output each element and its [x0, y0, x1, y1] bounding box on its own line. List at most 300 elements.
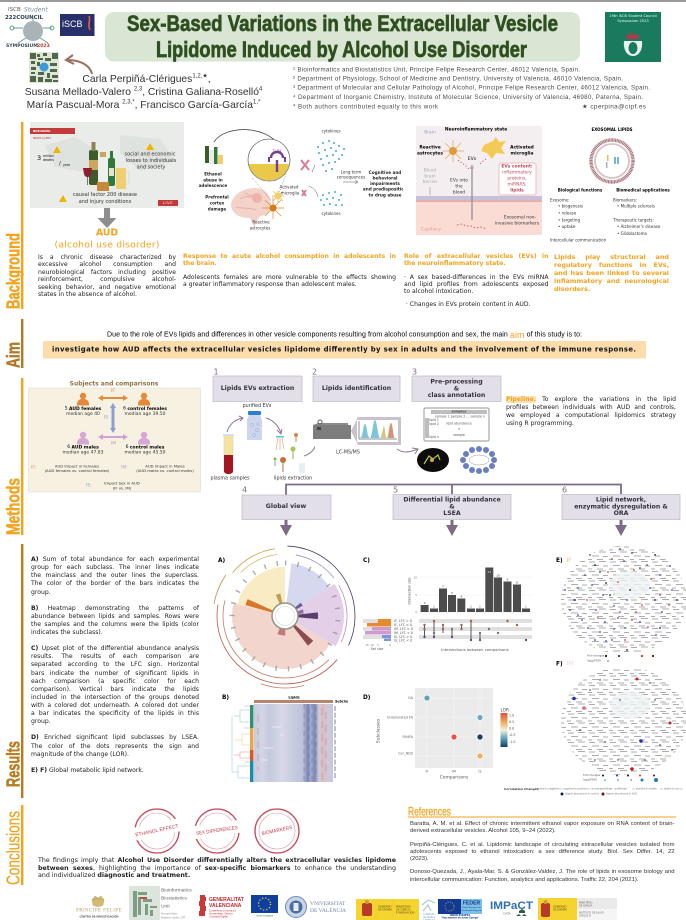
network correlation legend: Higher abundance in control	[565, 792, 599, 796]
pipeline step headers 1 to 3: Lipids identification	[322, 385, 391, 392]
chart C: upset plot: 8	[516, 580, 518, 584]
chart C: upset plot: 0	[389, 643, 391, 647]
logo: iSCB	[60, 14, 94, 36]
logo: Instituto de Salud Carlos III: de Salud	[423, 915, 435, 919]
logo: Instituto de Salud Carlos III	[420, 898, 437, 920]
logo: IMPaCT data: DATA	[503, 912, 511, 916]
chart C: upset plot: 13	[487, 570, 491, 574]
text: results legend: indicates the subclass).	[31, 629, 103, 636]
pipeline step headers 4 to 6 with connectors: Differential lipid abundance	[403, 496, 501, 504]
logo: European Union flag	[251, 895, 279, 919]
text: response to acute alcohol consumption: a greater inflammatory response than adolescent males.	[183, 281, 357, 288]
chart C: upset plot: C)	[363, 558, 370, 564]
logo: Gobierno de Espana 2: INSTITUTO DE SALUD	[579, 912, 604, 914]
logo: ISCB student council symposium: ISCB	[8, 7, 21, 13]
logo: Gobierno de Espana: MINISTERIO	[396, 904, 411, 908]
chart C: upset plot	[363, 558, 532, 652]
affiliations: * Both authors contributed equally to this work	[293, 104, 439, 110]
illustration: neuroinflammatory state: microglia	[511, 150, 534, 156]
chart C: upset plot: 2	[424, 601, 426, 605]
text: AUD definition: neurobiological factors including positive	[38, 269, 176, 276]
chart D: LSEA dot plot: 0.5	[509, 720, 514, 724]
text: results legend: C) Upset plot of the differential abundance analysis	[31, 645, 199, 652]
panel: subjects and comparisons: IF:	[31, 464, 36, 470]
text: AUD definition: seeking behavior, and negative emotional	[38, 284, 176, 291]
chart A: circular abundance plot: A)	[218, 558, 225, 564]
chart D: LSEA dot plot	[363, 688, 516, 780]
chart C: upset plot: 1	[470, 604, 472, 608]
panel: subjects and comparisons: (AUD females vs. control females)	[45, 468, 110, 473]
text: results legend: each comparison (a specific color for each	[31, 678, 199, 685]
logo: Universitat de Valencia: VNIVERSITAT	[310, 901, 346, 907]
stamp: sex differences	[193, 807, 241, 855]
illustration: neuroinflammatory state: brain	[424, 174, 436, 180]
chart C: upset plot: IS, LFC < 0	[394, 638, 412, 642]
logo: Gobierno de Espana 2: GOBIERNO	[553, 904, 567, 908]
chart B: heatmap of lipids and samples: Lipids	[288, 696, 300, 700]
text: AUD definition: reinforcement, compulsive alcohol-	[38, 276, 176, 283]
network correlation legend	[504, 787, 683, 796]
text: AUD definition: excessive alcohol consumption and	[38, 261, 176, 268]
chart C: upset plot: 10	[370, 643, 374, 647]
illustration: exosomal lipids: • uptake	[558, 224, 576, 229]
chart D: LSEA dot plot: IM	[452, 770, 456, 774]
stamp: biomarkers: BIOMARKERS	[261, 825, 293, 837]
panel: subjects and comparisons: median age 39.50	[124, 411, 166, 417]
illustration: neuroinflammatory state: proteins,	[507, 176, 527, 182]
chart C: upset plot: 4	[460, 594, 462, 598]
illustration: neuroinflammatory state: Brain	[424, 130, 436, 136]
logo: Bioinformatics and Biostatistics Unit: Principe Felipe	[161, 912, 178, 916]
illustration: exosomal lipids: • targeting	[558, 218, 580, 222]
affiliations: ★ cperpina@cipf.es	[582, 104, 646, 110]
illustration: ethanol abuse in adolescence: Prefrontal	[205, 194, 229, 200]
logo: ISCB student council symposium: Student	[24, 6, 48, 14]
affiliations	[293, 66, 650, 110]
illustration: neuroinflammatory state: Blood	[424, 168, 436, 174]
chart D: LSEA dot plot: 0.0	[509, 726, 514, 730]
text: role of extracellular vesicles: · A sex based-differences in the EVs miRNA	[404, 274, 548, 281]
text: pipeline description: Pipeline. To explore the variations in the lipid	[506, 396, 676, 403]
panel: subjects and comparisons: IF	[111, 388, 115, 394]
text: role of extracellular vesicles: and lipid profiles from adolescents exposed	[404, 281, 548, 288]
chart C: upset plot: IM, LFC > 0	[394, 627, 413, 631]
logo: iSCB: iSCB	[62, 19, 83, 29]
logo: Bioinformatics and Biostatistics Unit: Bioinformatics	[161, 888, 192, 894]
illustration: exosomal lipids	[550, 127, 670, 242]
logo: ISCB student council symposium: SYMPOSIUM	[6, 43, 38, 49]
logo: ISCB student council symposium: 222COUNCIL	[5, 15, 44, 21]
pipeline step headers 4 to 6 with connectors: Lipid network,	[596, 496, 646, 504]
illustration: exosomal lipids: • Multiple sclerosis	[617, 204, 655, 208]
chart C: upset plot: 1	[525, 604, 527, 608]
illustration: exosomal lipids: Exosome:	[550, 198, 569, 202]
panel: global alcohol statistics illustration: year	[63, 163, 71, 167]
pipeline step headers 4 to 6 with connectors: 5	[393, 486, 398, 494]
text: response to acute alcohol consumption: Response to acute alcohol consumption in adolescents in	[183, 253, 396, 260]
logo: 19th ISCB student council symposium: Symposium 2023	[617, 19, 649, 23]
aim statement box: investigate how AUD affects the extracellular vesicles lipidome differently by sex in adults and the involvement of the immune response.	[52, 346, 636, 354]
chart C: upset plot: IF, LFC < 0	[394, 623, 412, 627]
logo: Generalitat Valenciana: Universitats, Ciència	[209, 912, 233, 916]
text: results legend: group for each subclass. The inner lines indicate	[31, 564, 199, 571]
text: results legend: D) Enriched significant lipid subclasses by LSEA.	[31, 734, 199, 741]
logo: Gobierno de Espana 2: DE CIENCIA	[579, 904, 593, 908]
illustration: neuroinflammatory state: miRNAS,	[507, 182, 527, 188]
chart C: upset plot: 1	[479, 604, 481, 608]
network correlation legend: unaffected	[614, 788, 627, 790]
logo: Bioinformatics and Biostatistics Unit: Unit	[161, 904, 170, 910]
reference list: Donoso-Quezada, J., Ayala-Mar, S. & González-Valdez, J. The role of lipids in exosome biology and	[410, 869, 674, 875]
arrow to QR code	[64, 54, 93, 74]
pipeline illustration: data table and databases: sample 1 sample 2 ... sample n	[435, 414, 485, 418]
stamp: ethanol effect	[133, 807, 181, 855]
chart D: LSEA dot plot: Comparisons	[440, 774, 469, 780]
chart D: LSEA dot plot: Cer_NDS	[398, 752, 413, 756]
logo: Gobierno de Espana	[356, 898, 420, 920]
logo: Principe Felipe: CENTRO DE INVESTIGACIÓN	[80, 914, 118, 918]
text: results legend: group.	[31, 588, 51, 596]
reference list: derived extracellular vesicles. Alcohol 105, 9–24 (2022).	[410, 828, 556, 834]
pipeline step headers 1 to 3: class annotation	[428, 392, 485, 399]
pipeline step headers 1 to 3: &	[454, 386, 460, 392]
pipeline illustration: data table and databases: ×	[458, 427, 461, 431]
illustration: ethanol abuse in adolescence: adolescence	[199, 183, 227, 188]
text: results legend: separated according to the LFC sign. Horizontal	[31, 661, 199, 668]
panel: subjects and comparisons: (AUD males vs. control males)	[136, 468, 194, 473]
text: conclusions: between sexes, highlighting the importance of sex-specific biomarkers to enhance the understanding	[38, 865, 396, 872]
illustration: ethanol abuse in adolescence: Cognitive and	[369, 170, 401, 175]
pipeline illustration: data table and databases: lipid 1	[429, 418, 439, 422]
section label: Results: Results	[4, 741, 24, 787]
network correlation legend: Higher abundance in AUD	[606, 792, 637, 796]
text: lipids structural and regulatory functions: inflammatory and neurological	[554, 277, 669, 285]
logo: Universitat de Valencia	[285, 893, 355, 920]
logo: ISCB student council symposium: 2023	[37, 43, 50, 49]
text: results legend: abundance between lipids and samples. Rows were	[31, 613, 199, 620]
section label: Aim	[4, 319, 24, 368]
illustration: ethanol abuse in adolescence: abuse in	[203, 178, 223, 182]
chart D: LSEA dot plot: IF	[426, 770, 429, 774]
illustration: exosomal lipids: • Glioblastoma	[617, 231, 647, 236]
illustration: exosomal lipids: Intercellular communication	[550, 238, 607, 242]
illustration: ethanol abuse in adolescence: cortex	[210, 200, 225, 206]
illustration: ethanol abuse in adolescence: behavioral	[372, 176, 398, 180]
text: role of extracellular vesicles	[404, 253, 548, 308]
pipeline illustration: lipid extraction	[210, 403, 315, 482]
logo: ISCB student council symposium	[5, 6, 54, 49]
affiliations: ² Department of Physiology, School of Medicine and Dentistry, University of Valencia, 46010 Valencia, Spain.	[293, 76, 623, 82]
illustration: neuroinflammatory state: astrocytes	[417, 150, 443, 156]
logo: European Union flag: Unión Europea	[256, 914, 274, 918]
logo: FEDER: FEDER	[463, 900, 481, 906]
text: role of extracellular vesicles: · Changes in EVs protein content in AUD.	[406, 301, 530, 308]
chart F: lipid network IM: log(p/FDR)	[583, 778, 597, 782]
illustration: neuroinflammatory state: EVs content:	[501, 164, 533, 170]
logo: Bioinformatics and Biostatistics Unit	[129, 886, 197, 920]
affiliations: ¹ Bioinformatics and Biostatistics Unit, Principe Felipe Research Center, 46012 Valencia, Spain.	[293, 66, 580, 74]
pipeline step headers 4 to 6 with connectors: Global view	[266, 503, 306, 510]
chart D: LSEA dot plot: GA	[408, 696, 414, 700]
panel: subjects and comparisons	[28, 380, 201, 492]
chart C: upset plot: Set size	[371, 647, 383, 651]
pipeline illustration: data table and databases: lipid abundance	[446, 422, 472, 426]
chart F: lipid network IM: IM	[566, 662, 573, 668]
chart E: lipid network IF: IF	[566, 558, 572, 564]
text: lipids structural and regulatory functions: Lipids play structural and	[554, 253, 669, 261]
reference list: intercellular communication: Function, analytics and applications. Traffic 22, 204 (2021).	[410, 877, 638, 883]
illustration: neuroinflammatory state: the	[455, 184, 463, 190]
pipeline step headers 4 to 6 with connectors: 4	[242, 486, 247, 494]
logo: FEDER: UNIÓN EUROPEA	[450, 914, 471, 917]
text: conclusions: The findings imply that Alcohol Use Disorder differentially alters the extracellular vesicles lipidome	[38, 857, 396, 864]
illustration: ethanol abuse in adolescence: consequences	[337, 174, 365, 180]
pipeline illustration: lipid extraction: plasma samples	[211, 476, 250, 482]
logo: Gobierno de Espana: DE ESPAÑA	[378, 906, 392, 912]
panel: global alcohol statistics illustration: LIVE	[163, 201, 173, 205]
illustration: ethanol abuse in adolescence: impairments	[370, 181, 400, 186]
pipeline step headers 1 to 3	[212, 368, 502, 402]
top rule	[0, 0, 686, 2]
logo: Gobierno de Espana: DE CIENCIA	[396, 908, 411, 912]
chart A: circular abundance plot	[214, 546, 356, 688]
pipeline illustration: data table and databases: lipid n	[429, 435, 439, 439]
pipeline step headers 4 to 6 with connectors: ORA	[614, 510, 629, 517]
illustration: exosomal lipids: • Alzheimer's disease	[617, 224, 661, 229]
logo: 19th ISCB student council symposium: 19th ISCB Student Council	[609, 14, 657, 18]
text: AUD definition	[38, 254, 176, 298]
text: results legend: A) Sum of total abundance for each experimental	[31, 556, 199, 563]
text: role of extracellular vesicles: Role of extracellular vesicles (EVs) in	[404, 253, 548, 260]
illustration: neuroinflammatory state: Neuroinflammatory state	[445, 126, 507, 132]
chart D: LSEA dot plot: D)	[363, 695, 371, 701]
chart C: upset plot: Intersections between comparisons	[441, 647, 509, 652]
chart D: LSEA dot plot: Subclasses	[376, 718, 382, 743]
pipeline step headers 1 to 3: Lipids EVs extraction	[221, 385, 294, 392]
QR code with twitter mark	[29, 52, 59, 83]
illustration: ethanol abuse in adolescence: Activated	[280, 184, 299, 190]
reference list: (2023).	[410, 856, 429, 862]
illustration: ethanol abuse in adolescence	[198, 128, 403, 230]
chart E: lipid network IF	[556, 546, 686, 662]
chart F: lipid network IM	[556, 661, 686, 782]
text: response to acute alcohol consumption: the brain.	[183, 260, 217, 267]
illustration: ethanol abuse in adolescence: cytokines	[321, 211, 341, 216]
logo: Universitat de Valencia: DE VALÈNCIA	[310, 906, 346, 914]
chart C: upset plot: IM, LFC < 0	[394, 631, 413, 635]
text: results legend: results. The results of each comparison are	[31, 653, 199, 660]
logo: Principe Felipe: PRINCIPE FELIPE	[76, 908, 122, 914]
text: pipeline description: profiles between individuals with AUD and controls,	[506, 404, 676, 411]
illustration: exosomal lipids: • biogenesis	[558, 204, 583, 208]
text: response to acute alcohol consumption	[183, 253, 396, 288]
illustration: exosomal lipids: Biomarkers:	[613, 198, 637, 202]
logo: FEDER: Desarrollo Regional	[461, 909, 482, 912]
text: results legend: bars indicate the number of significant lipids in	[31, 670, 199, 676]
text: results legend: group.	[31, 718, 51, 725]
text: lipids structural and regulatory functions	[554, 253, 669, 293]
pipeline step headers 4 to 6 with connectors: LSEA	[443, 510, 461, 517]
pipeline illustration: data table and databases	[396, 407, 497, 474]
illustration: ethanol abuse in adolescence: cytokines	[321, 128, 341, 134]
text: lipids structural and regulatory functions: disorders.	[554, 285, 590, 293]
chart C: upset plot: 15	[365, 643, 369, 647]
chart C: upset plot: 9	[507, 578, 509, 582]
reference list: adolescents exposed to ethanol intoxication: a sex difference study. Biol. Sex Differ. 14, 22	[410, 849, 674, 855]
title banner	[105, 12, 580, 62]
logo: Gobierno de Espana 2	[538, 897, 618, 920]
illustration: ethanol abuse in adolescence: Reactive	[252, 220, 270, 224]
text: results legend: included in the intersection of the groups denoted	[31, 694, 199, 701]
panel: subjects and comparisons: 6 control males	[126, 444, 165, 450]
authors: Carla Perpiñá-Clérigues1,2,★,	[82, 73, 211, 84]
logo: Gobierno de Espana 2: CARLOS III	[579, 914, 591, 918]
logo: Generalitat Valenciana: VALENCIANA	[209, 903, 242, 909]
chart C: upset plot: 5	[377, 643, 379, 647]
stamp: biomarkers	[253, 807, 301, 855]
illustration: neuroinflammatory state: blood	[453, 190, 465, 196]
logo: FEDER: Fondo Europeo de	[462, 906, 482, 909]
text: role of extracellular vesicles: to alcohol intoxication.	[404, 288, 473, 295]
logo: IMPaCT data	[488, 896, 535, 920]
pipeline illustration: lipid extraction: purified EVs	[243, 403, 272, 409]
authors: María Pascual-Mora 2,3,*, Francisco García-García1,*	[27, 100, 260, 111]
illustration: neuroinflammatory state	[416, 126, 542, 235]
panel: global alcohol statistics illustration: deaths	[43, 158, 54, 162]
chart D: LSEA dot plot: IS	[478, 770, 482, 774]
logo: FEDER: "Una manera de hacer Europa"	[441, 916, 479, 920]
logo: Generalitat Valenciana: GENERALITAT	[209, 897, 244, 903]
chart C: upset plot: 1	[433, 604, 435, 608]
chart C: upset plot: 10	[413, 576, 417, 580]
illustration: ethanol abuse in adolescence: astrocytes	[250, 226, 270, 230]
chart F: lipid network IM: F)	[556, 662, 563, 668]
illustration: ethanol abuse in adolescence: Long term	[341, 170, 361, 174]
network correlation legend: positive to stable	[636, 788, 657, 790]
text: results legend: magnitude of the change (LOR).	[31, 751, 129, 758]
pipeline illustration: LC-MS/MS and chromatogram	[313, 417, 401, 456]
AUD heading	[54, 228, 160, 250]
chart E: lipid network IF: log(p/FDR)	[587, 658, 601, 662]
pipeline step headers 4 to 6 with connectors: &	[449, 504, 455, 510]
text: conclusions	[38, 857, 396, 880]
panel: global alcohol statistics illustration: million	[43, 154, 54, 158]
chart E: lipid network IF: E)	[556, 558, 563, 564]
logo: Principe Felipe	[70, 893, 128, 920]
pipeline illustration: data table and databases: lipid 2	[429, 422, 439, 426]
text: pipeline description: we employed a computational lipidomics strategy	[506, 412, 676, 419]
chart C: upset plot: 10	[496, 574, 500, 578]
illustration: neuroinflammatory state: Activated	[510, 144, 534, 150]
text: results legend: The color of the dots represents the sign and	[31, 742, 199, 750]
panel: subjects and comparisons: IM:	[121, 464, 128, 470]
pipeline illustration: LC-MS/MS and chromatogram: LC-MS/MS	[336, 450, 360, 456]
panel: subjects and comparisons: median age 47.83	[62, 450, 104, 456]
logo: Gobierno de Espana: E INNOVACIÓN	[396, 910, 414, 914]
reference list: Baratta, A. M. et al. Effect of chronic intermittent ethanol vapor exposure on RNA content of brain-	[410, 821, 674, 827]
chart D: LSEA dot plot: -1.0	[509, 740, 515, 744]
chart B: heatmap of lipids and samples	[232, 696, 348, 782]
logo: Gobierno de Espana 2: DE ESPAÑA	[553, 906, 567, 912]
illustration: neuroinflammatory state: EVs	[468, 156, 477, 162]
logo: IMPaCT data: IMPaCT	[490, 900, 533, 912]
panel: subjects and comparisons: (IF vs. IM)	[113, 486, 132, 490]
illustration: exosomal lipids: Biological functions	[558, 188, 603, 192]
illustration: ethanol abuse in adolescence: damage	[208, 206, 226, 212]
pipeline step headers 4 to 6 with connectors	[242, 484, 680, 536]
panel: subjects and comparisons: Subjects and comparisons	[70, 380, 159, 388]
pipeline step headers 1 to 3: 3	[412, 368, 417, 376]
chart B label: B)	[222, 695, 229, 701]
illustration: ethanol abuse in adolescence: to drug abuse	[369, 192, 402, 198]
logo: Gobierno de Espana 2: MINISTERIO	[579, 902, 593, 904]
references	[408, 803, 676, 888]
text: role of extracellular vesicles: the neuroinflammatory state.	[404, 260, 506, 267]
illustration: neuroinflammatory state: lipids	[510, 188, 524, 194]
text: conclusions: and individualized diagnostic and treatment.	[38, 872, 190, 879]
panel: subjects and comparisons: IM	[111, 440, 116, 446]
panel: subjects and comparisons: 5 AUD females	[65, 406, 102, 412]
panel: subjects and comparisons: Impact Sex in AUD	[104, 480, 140, 486]
chart C: upset plot: Intersection size	[408, 577, 412, 605]
pipeline step headers 4 to 6 with connectors: enzymatic dysregulation &	[574, 504, 668, 510]
panel: global alcohol statistics illustration: and injury conditions	[79, 199, 132, 205]
logo: FEDER	[437, 898, 483, 920]
illustration: neuroinflammatory state: inflammatory	[502, 170, 532, 176]
panel: subjects and comparisons: 6 control females	[123, 406, 167, 412]
illustration: neuroinflammatory state: invasive biomarkers	[495, 220, 540, 226]
chart E: lipid network IF: Fold changes	[587, 654, 605, 658]
chart C: upset plot: 5	[415, 593, 417, 597]
logo: Bioinformatics and Biostatistics Unit: Biostatistics	[161, 896, 187, 902]
illustration: neuroinflammatory state: Capillary	[421, 226, 441, 232]
text: pipeline description: using R programming.	[506, 420, 574, 427]
aim statement box	[43, 341, 646, 358]
AUD heading: (alcohol use disorder)	[54, 240, 160, 250]
logo: Instituto de Salud Carlos III: Instituto	[423, 912, 435, 916]
panel: global alcohol statistics illustration: and society	[137, 164, 165, 170]
text: results legend: E) F) Global metabolic lipid network.	[31, 767, 144, 774]
illustration: ethanol abuse in adolescence: TLR4	[272, 149, 281, 153]
illustration: ethanol abuse in adolescence: microglia	[281, 190, 300, 196]
panel: global alcohol statistics illustration: BREAKING	[33, 129, 51, 133]
logo: Generalitat Valenciana	[199, 893, 246, 920]
section label: Methods: Methods	[4, 478, 24, 535]
text: results legend: with a colored dot underneath. A colored dot under	[31, 702, 199, 709]
text: results legend: The color of the border of the bars indicates the	[31, 580, 199, 587]
panel: subjects and comparisons: IS	[104, 414, 108, 420]
text: results legend: the mainclass and the outer lines the superclass.	[31, 572, 199, 579]
text: results legend: comparison). Vertical bars indicate the lipids	[31, 686, 199, 693]
section label: Background: Background	[4, 233, 24, 309]
authors: Susana Mellado-Valero 2,3, Cristina Galiana-Roselló4	[25, 86, 262, 98]
text: results legend: a bar indicates the specificity of the lipids in this	[31, 710, 199, 717]
text: response to acute alcohol consumption: Adolescents females are more vulnerable to the effects showing	[183, 274, 396, 281]
text: AUD definition: states in the absence of alcohol.	[38, 291, 137, 298]
network correlation legend: unchanged/other	[591, 788, 612, 790]
pipeline step headers 4 to 6 with connectors: 6	[562, 486, 567, 494]
chart C: upset plot: 5	[451, 591, 453, 595]
network correlation legend: Correlation Changes	[504, 787, 539, 791]
logo: Generalitat Valenciana: i Societat Digital	[209, 916, 228, 918]
panel: subjects and comparisons: AUD Impact in Females	[55, 464, 99, 468]
chart D: LSEA dot plot: 1.0	[509, 714, 514, 718]
pipeline illustration: data table and databases: samples	[452, 410, 466, 414]
chart F: lipid network IM: Fold changes	[583, 773, 601, 777]
text: lipids structural and regulatory functions: and has been linked to several	[554, 269, 669, 277]
illustration: neuroinflammatory state: Exosomal non-	[504, 214, 537, 220]
network correlation legend: stable to pos	[664, 788, 680, 790]
